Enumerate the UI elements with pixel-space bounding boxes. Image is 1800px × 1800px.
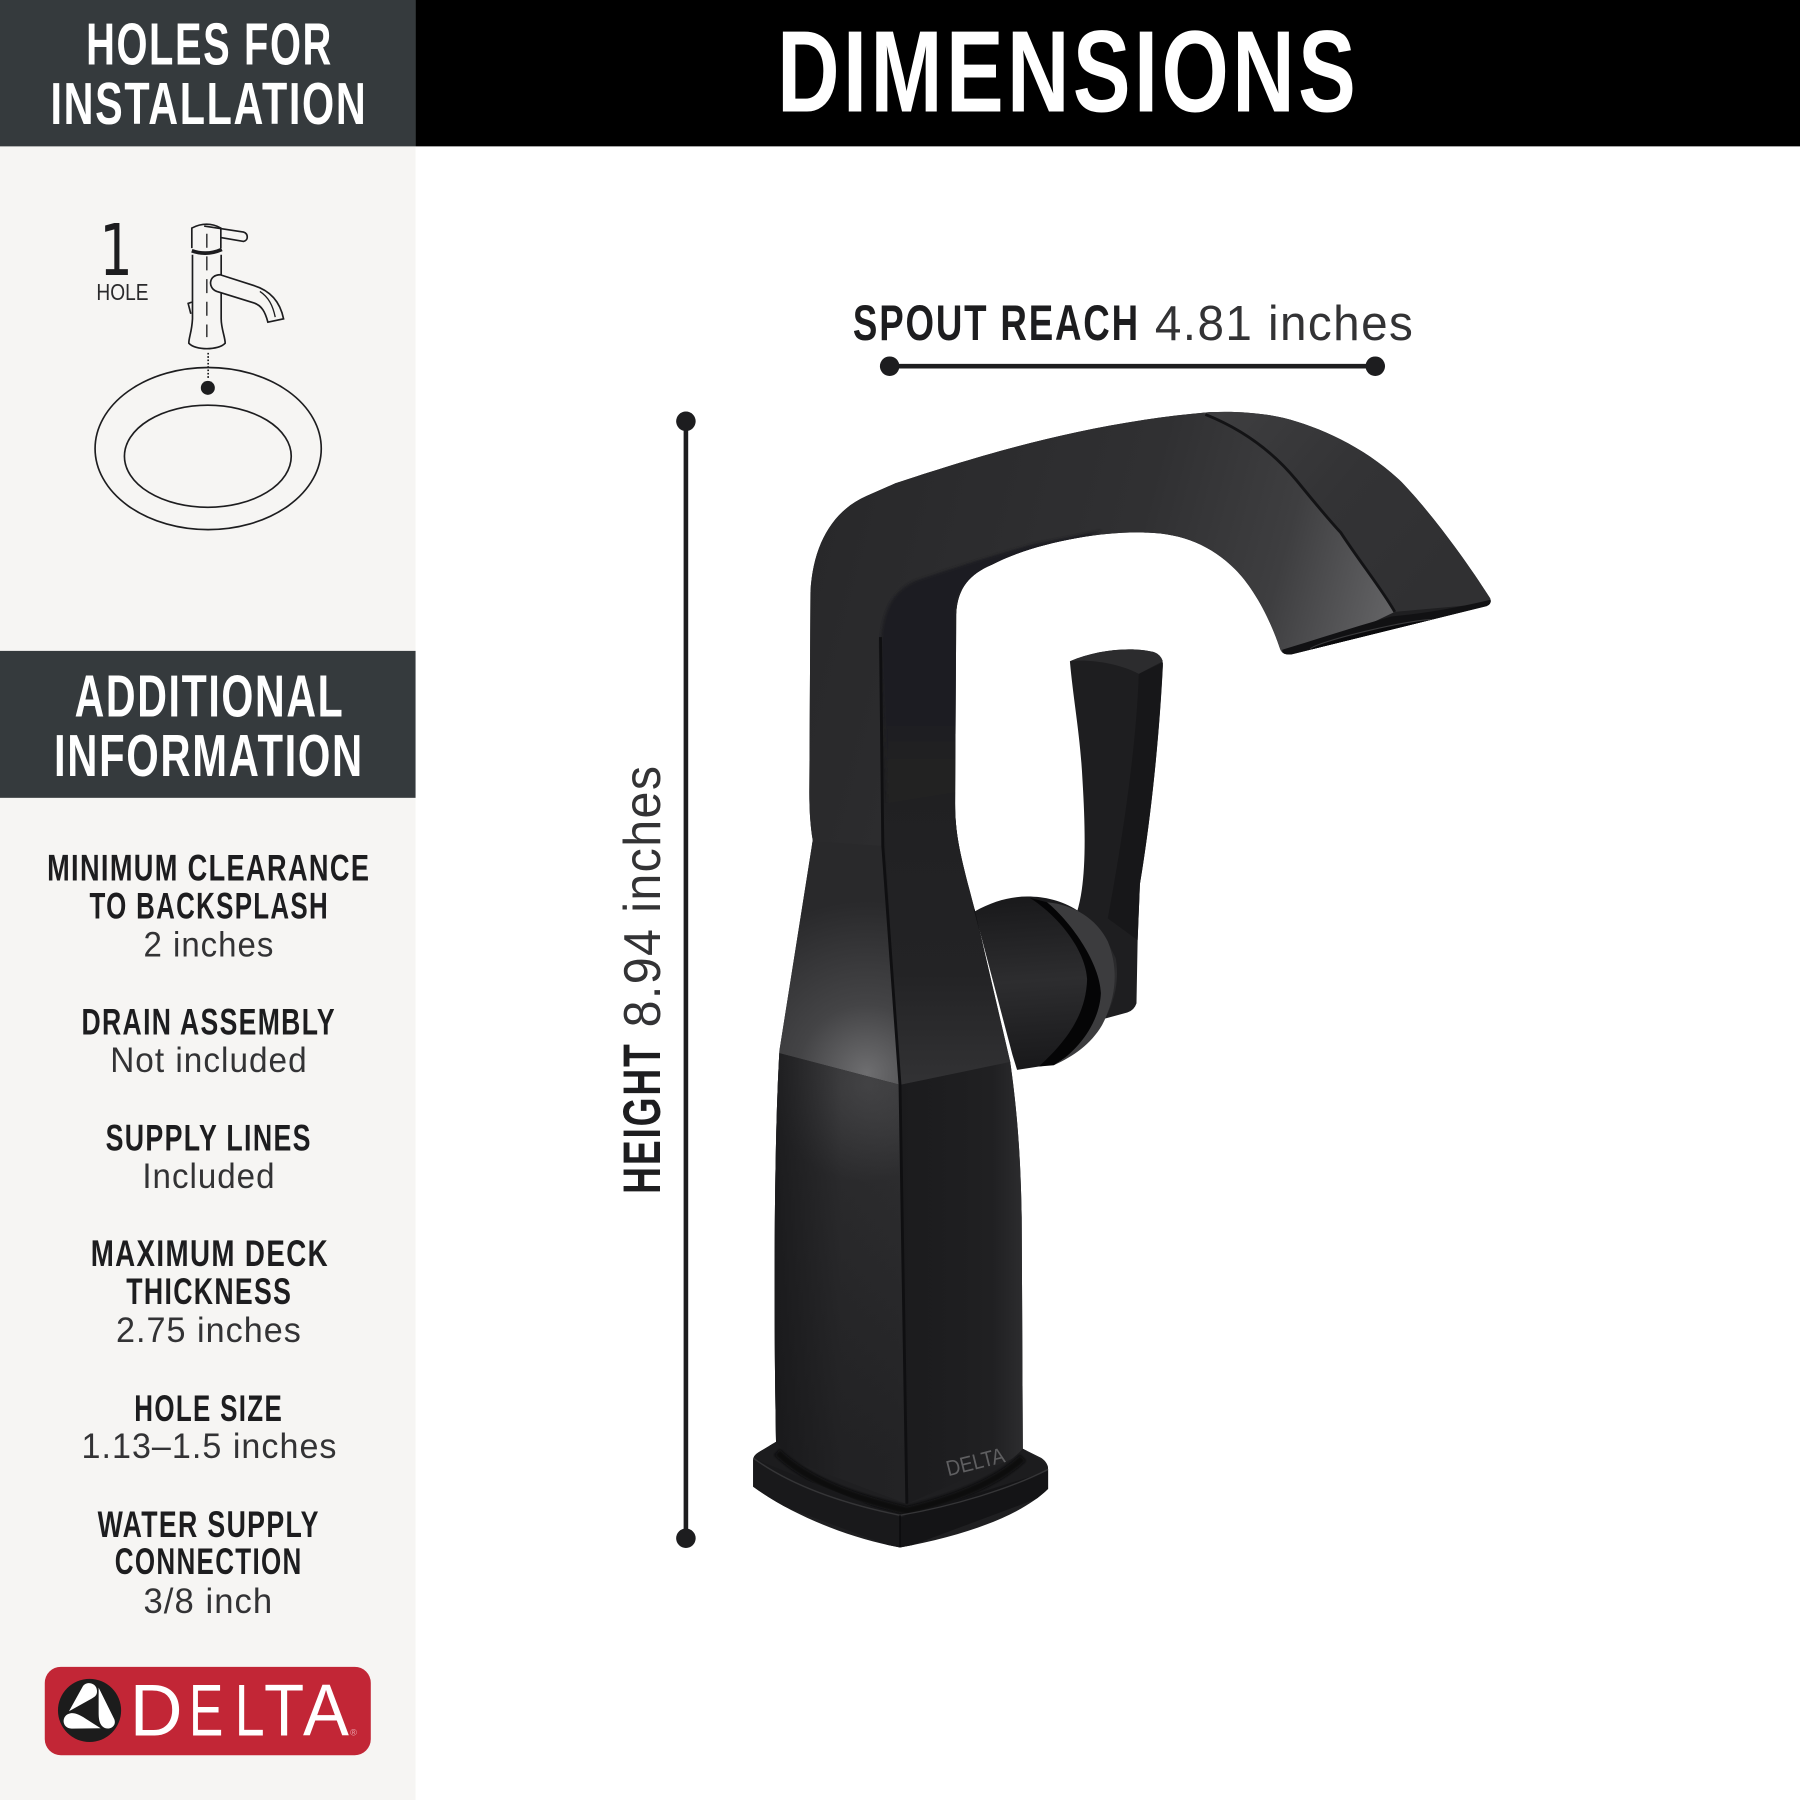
logo: delta: A	[303, 1669, 349, 1752]
product photo: matte black faucet	[746, 402, 1504, 1550]
heading: holes for installation: HOLES FOR	[86, 10, 333, 77]
spec: minimum clearance to backsplash: 2 inches	[143, 924, 274, 964]
logo: delta	[45, 1667, 371, 1755]
spec: minimum clearance to backsplash: TO BACKSPLASH	[90, 885, 329, 926]
dimension: spout reach: SPOUT REACH	[853, 294, 1140, 351]
faucet hub	[975, 897, 1117, 1070]
dimension: height	[613, 412, 696, 1548]
spec: minimum clearance to backsplash	[47, 847, 370, 964]
faucet handle	[1056, 649, 1163, 1019]
spec: maximum deck thickness: 2.75 inches	[116, 1310, 302, 1350]
heading: additional information: INFORMATION	[54, 722, 364, 789]
body left face	[769, 1053, 902, 1446]
underside of spout	[880, 530, 1102, 872]
spout right facet	[1194, 402, 1498, 612]
dimension: height: 8.94 inches	[613, 765, 671, 1027]
logo: delta: D	[130, 1669, 183, 1752]
dimension: spout reach: 4.81 inches	[1155, 296, 1414, 351]
dimension: height: HEIGHT	[613, 1042, 672, 1194]
heading: additional information: ADDITIONAL	[75, 662, 344, 729]
neck right face	[896, 796, 1010, 1084]
title: dimensions: DIMENSIONS	[777, 6, 1359, 136]
hole count label: HOLE	[96, 279, 148, 305]
hole count label: 1	[99, 208, 133, 292]
logo: delta: E	[189, 1669, 223, 1752]
heading: holes for installation	[0, 0, 416, 146]
spec: minimum clearance to backsplash: MINIMUM CLEARANCE	[47, 847, 370, 888]
crease between body and hub	[974, 909, 984, 950]
spec: hole size	[82, 1388, 338, 1466]
spec: maximum deck thickness: MAXIMUM DECK	[91, 1233, 329, 1274]
spec: drain assembly: Not included	[110, 1040, 308, 1080]
faucet body and spout	[746, 402, 1504, 1550]
base	[753, 1442, 1048, 1506]
spec: hole size: HOLE SIZE	[134, 1388, 283, 1429]
spec: hole size: 1.13–1.5 inches	[82, 1426, 338, 1466]
spec: supply lines	[106, 1117, 312, 1196]
spec: water supply connection: 3/8 inch	[143, 1581, 273, 1621]
spec: drain assembly: DRAIN ASSEMBLY	[82, 1001, 336, 1042]
engraved brand: DELTA	[943, 1442, 1008, 1481]
logo: delta: T	[264, 1669, 304, 1752]
body right face	[908, 1062, 1028, 1459]
spec: supply lines: SUPPLY LINES	[106, 1117, 312, 1158]
sink outline	[95, 353, 321, 530]
spec: maximum deck thickness	[91, 1233, 329, 1350]
spec: drain assembly	[82, 1001, 336, 1080]
heading: additional information	[0, 651, 416, 798]
spec: supply lines: Included	[142, 1156, 276, 1196]
spout and column surface	[792, 402, 1395, 846]
lower body highlight	[769, 840, 900, 1085]
heading: holes for installation: INSTALLATION	[51, 70, 367, 137]
icon: one hole faucet and sink diagram	[95, 208, 321, 530]
spec: water supply connection	[98, 1504, 320, 1621]
faucet line drawing	[188, 224, 284, 349]
spec: water supply connection: CONNECTION	[115, 1541, 303, 1582]
logo: delta: L	[235, 1669, 265, 1752]
dimension: spout reach	[853, 294, 1414, 376]
panel: left sidebar background	[0, 0, 416, 1800]
logo: delta: ®	[350, 1728, 357, 1738]
header bar: dimensions	[416, 0, 1800, 146]
spec: maximum deck thickness: THICKNESS	[126, 1271, 292, 1312]
spout nozzle	[1282, 599, 1492, 659]
spec: water supply connection: WATER SUPPLY	[98, 1504, 320, 1545]
